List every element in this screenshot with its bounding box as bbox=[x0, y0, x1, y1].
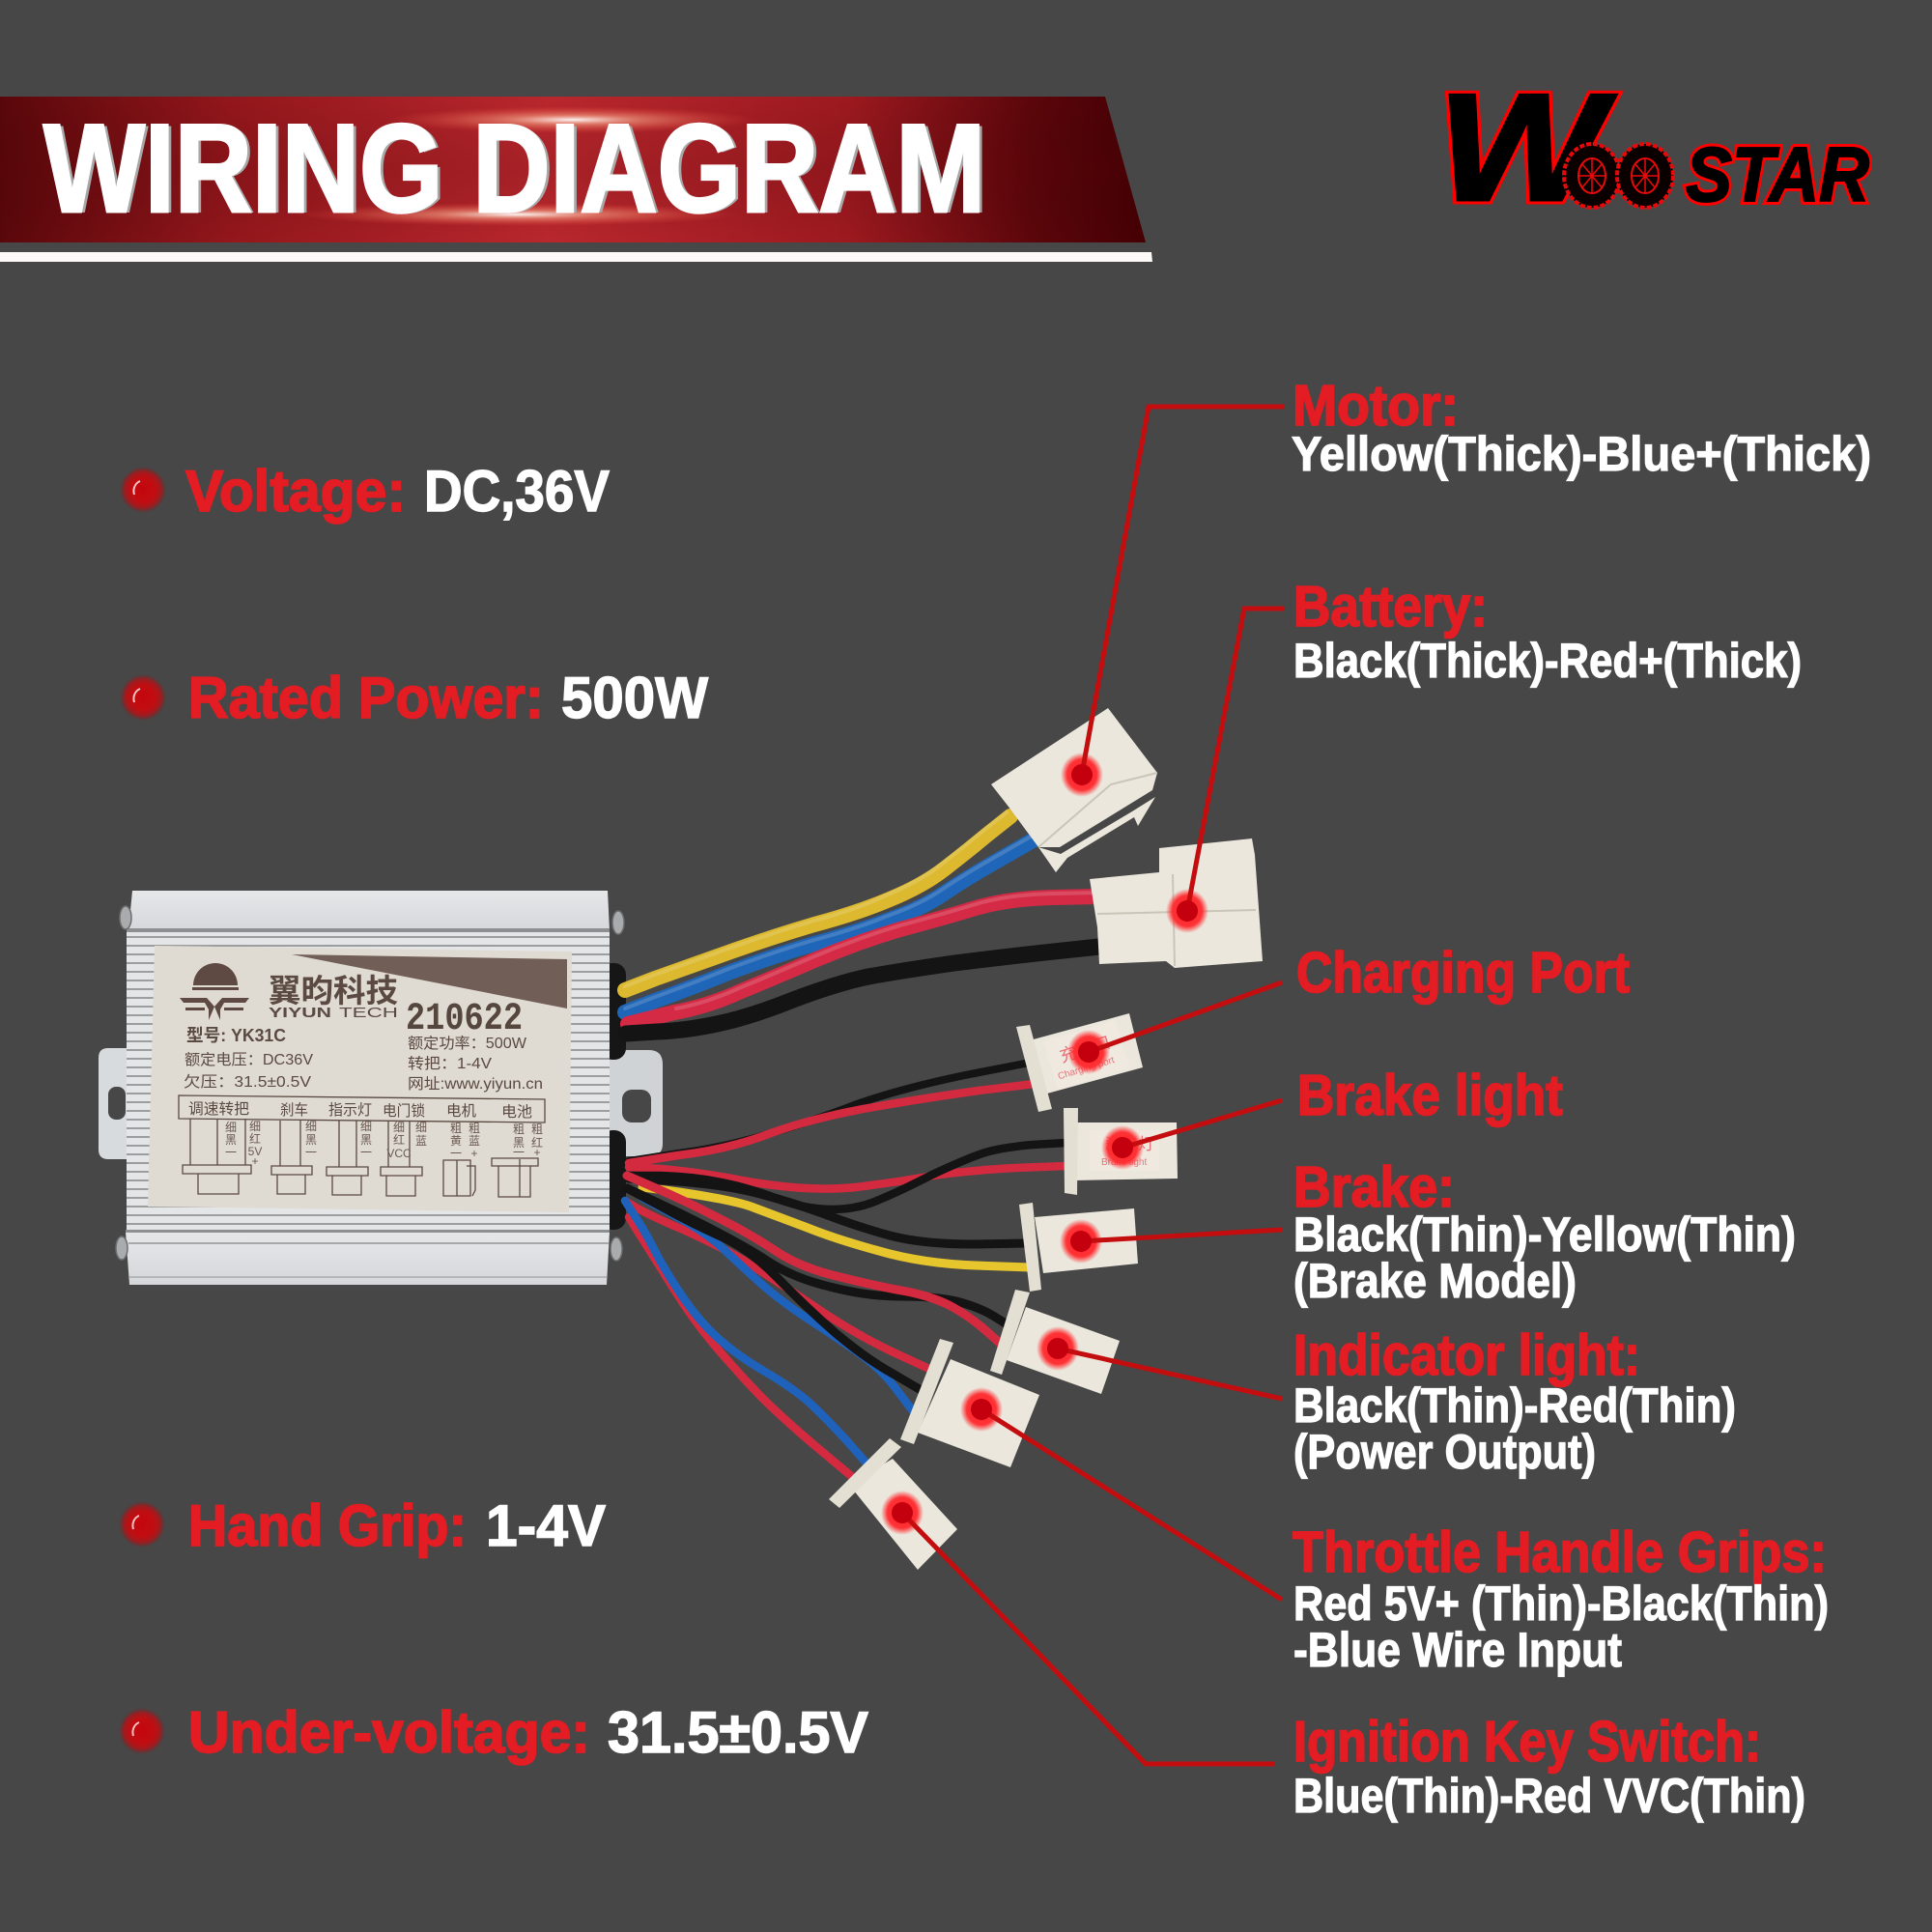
bullet bbox=[120, 674, 166, 721]
label terminal table: 一 bbox=[360, 1146, 372, 1159]
callout: indicator light bbox=[1293, 1323, 1736, 1479]
title banner bbox=[0, 97, 1146, 242]
label terminal table: 调速转把 bbox=[188, 1100, 249, 1118]
logo W core: W bbox=[1437, 63, 1617, 233]
connector label bbox=[1043, 1020, 1130, 1090]
label terminal table: 一 bbox=[513, 1146, 525, 1159]
screws bbox=[116, 906, 624, 1261]
banner white strip bbox=[0, 252, 1152, 262]
leader line: brake bbox=[1060, 1219, 1282, 1264]
spec: under-voltage: Under-voltage: bbox=[188, 1700, 590, 1765]
label terminal table: 一 bbox=[450, 1147, 462, 1160]
product label: 转把：1-4V bbox=[408, 1055, 493, 1072]
connector label: Charging port bbox=[1057, 1055, 1116, 1082]
grommets bbox=[601, 963, 626, 1230]
label terminal table: 电机 bbox=[446, 1102, 476, 1120]
product label: 网址:www.yiyun.cn bbox=[408, 1075, 543, 1093]
product label: TECH bbox=[339, 1005, 398, 1021]
spec: voltage: DC,36V bbox=[424, 459, 610, 524]
spec: hand grip: 1-4V bbox=[486, 1493, 606, 1558]
product label bbox=[148, 946, 572, 1212]
callout: battery: Black(Thick)-Red+(Thick) bbox=[1293, 634, 1802, 688]
label terminal table bbox=[179, 1095, 545, 1197]
bullet bbox=[120, 467, 166, 513]
label terminal table: + bbox=[251, 1154, 259, 1168]
label terminal table: 细 bbox=[249, 1120, 261, 1133]
callout: battery bbox=[1293, 575, 1802, 688]
connector label: 充电口 bbox=[1058, 1033, 1113, 1066]
connector: ignition bbox=[829, 1438, 957, 1570]
callout: ignition key switch: Blue(Thin)-Red VVC(Thin) bbox=[1293, 1769, 1805, 1823]
label terminal table: + bbox=[470, 1147, 478, 1160]
leader line: brake light bbox=[1101, 1100, 1282, 1170]
spec: under-voltage: 31.5±0.5V bbox=[608, 1700, 868, 1765]
spec: rated power bbox=[120, 666, 708, 730]
label terminal table: 黑 bbox=[513, 1136, 525, 1150]
product label: 额定功率：500W bbox=[408, 1035, 526, 1052]
spec: voltage: Voltage: bbox=[185, 459, 406, 524]
bullet bbox=[119, 1708, 165, 1754]
callout: charging port: Charging Port bbox=[1296, 941, 1630, 1005]
label terminal table: 蓝 bbox=[469, 1134, 480, 1148]
product label: YIYUN bbox=[269, 1005, 331, 1021]
callout: throttle handle grips bbox=[1293, 1520, 1829, 1677]
label terminal table: 细 bbox=[305, 1120, 317, 1133]
aluminium body bbox=[126, 891, 610, 1285]
logo STAR: STAR bbox=[1686, 131, 1869, 217]
title text: WIRING DIAGRAM bbox=[43, 98, 985, 239]
label terminal table: 黑 bbox=[305, 1133, 317, 1147]
label terminal table: 粗 bbox=[531, 1122, 543, 1136]
spec: hand grip bbox=[119, 1493, 606, 1558]
leader line: battery bbox=[1166, 609, 1285, 933]
connector label: Brake light bbox=[1101, 1157, 1147, 1168]
callout: motor: Motor: bbox=[1293, 374, 1459, 438]
label terminal table: 红 bbox=[249, 1131, 261, 1146]
label terminal table: 5V bbox=[248, 1145, 262, 1158]
connector label: 刹车灯 bbox=[1105, 1135, 1154, 1153]
callout: brake bbox=[1293, 1155, 1796, 1308]
label terminal table: 细 bbox=[415, 1121, 427, 1134]
label specs: 型号: YK31C bbox=[186, 1026, 286, 1045]
callout: ignition key switch bbox=[1293, 1710, 1805, 1823]
callout: brake: Brake: bbox=[1293, 1155, 1455, 1219]
label terminal table: 细 bbox=[225, 1121, 237, 1134]
connector: motor bbox=[991, 708, 1157, 872]
label terminal table: 指示灯 bbox=[328, 1101, 372, 1119]
label terminal table: 粗 bbox=[513, 1122, 525, 1136]
label terminal table: 黑 bbox=[360, 1133, 372, 1147]
connector label bbox=[1090, 1130, 1159, 1171]
callout: brake: (Brake Model) bbox=[1293, 1254, 1577, 1308]
label terminal table: 红 bbox=[531, 1135, 543, 1150]
label terminal table: 红 bbox=[393, 1132, 405, 1147]
callout: battery: Battery: bbox=[1293, 575, 1488, 639]
label terminal table: 电池 bbox=[501, 1103, 532, 1121]
brand logo bbox=[1437, 63, 1869, 233]
logo wheels bbox=[1564, 144, 1673, 208]
callout: motor: Yellow(Thick)-Blue+(Thick) bbox=[1292, 427, 1871, 481]
callout: indicator light: Black(Thin)-Red(Thin) bbox=[1293, 1378, 1736, 1433]
label terminal table: 黄 bbox=[450, 1134, 462, 1148]
callout: throttle handle grips: Throttle Handle Grips: bbox=[1293, 1520, 1827, 1584]
label terminal table: 一 bbox=[305, 1146, 317, 1159]
spec: rated power: 500W bbox=[561, 666, 708, 730]
callout: brake: Black(Thin)-Yellow(Thin) bbox=[1293, 1208, 1796, 1262]
leader line: motor bbox=[1061, 407, 1285, 797]
logo STAR core: STAR bbox=[1686, 131, 1869, 217]
connector: charging port bbox=[1016, 1013, 1143, 1112]
label terminal table: 细 bbox=[393, 1121, 405, 1134]
label brown triangle bbox=[292, 954, 567, 1009]
label terminal table: + bbox=[533, 1146, 541, 1159]
leader line: indicator light bbox=[1037, 1326, 1282, 1399]
connector: brake light bbox=[1064, 1108, 1178, 1195]
spec: rated power: Rated Power: bbox=[188, 666, 544, 730]
leader line: throttle bbox=[960, 1387, 1282, 1600]
label terminal table: 蓝 bbox=[415, 1134, 427, 1148]
connector: indicator light bbox=[990, 1290, 1120, 1394]
label terminal table: 粗 bbox=[450, 1122, 462, 1135]
callout: indicator light: Indicator light: bbox=[1293, 1323, 1640, 1387]
connector: battery bbox=[1090, 838, 1263, 968]
wires: thick motor and battery bbox=[625, 812, 1099, 1034]
logo W: W bbox=[1437, 63, 1617, 233]
label terminal table: 细 bbox=[360, 1120, 372, 1133]
leader line: charging port bbox=[1067, 982, 1282, 1074]
label terminal table: 刹车 bbox=[280, 1101, 308, 1119]
label logo bbox=[180, 963, 249, 1020]
product label: 欠压：31.5±0.5V bbox=[184, 1073, 312, 1091]
label date code: 210622 bbox=[406, 998, 523, 1041]
label terminal table: VCC bbox=[386, 1147, 412, 1160]
title text shadow: WIRING DIAGRAM bbox=[47, 99, 989, 240]
spec: hand grip: Hand Grip: bbox=[188, 1493, 467, 1558]
label brand: 翼昀科技 bbox=[269, 973, 398, 1009]
bullet bbox=[119, 1501, 165, 1548]
spec: voltage bbox=[120, 459, 610, 524]
callout: motor bbox=[1292, 374, 1871, 481]
connector: throttle bbox=[900, 1339, 1039, 1467]
wires: thin signal bundle bbox=[625, 1063, 1066, 1480]
mounting brackets bbox=[99, 1048, 663, 1159]
product label: 额定电压：DC36V bbox=[185, 1051, 314, 1068]
callout: brake light: Brake light bbox=[1297, 1064, 1563, 1127]
label terminal table: 电门锁 bbox=[383, 1102, 425, 1120]
callout: ignition key switch: Ignition Key Switch: bbox=[1293, 1710, 1761, 1774]
leader line: ignition bbox=[881, 1491, 1275, 1764]
callout: throttle handle grips: Red 5V+ (Thin)-Black(Thin) bbox=[1293, 1577, 1829, 1631]
spec: under-voltage bbox=[119, 1700, 868, 1765]
label terminal table: 黑 bbox=[225, 1133, 237, 1147]
label terminal table: 粗 bbox=[469, 1122, 480, 1135]
label terminal table: 一 bbox=[225, 1146, 237, 1159]
callout: throttle handle grips: -Blue Wire Input bbox=[1293, 1623, 1622, 1677]
motor controller bbox=[99, 891, 663, 1285]
connector: brake bbox=[1019, 1203, 1138, 1292]
callout: indicator light: (Power Output) bbox=[1293, 1425, 1596, 1479]
